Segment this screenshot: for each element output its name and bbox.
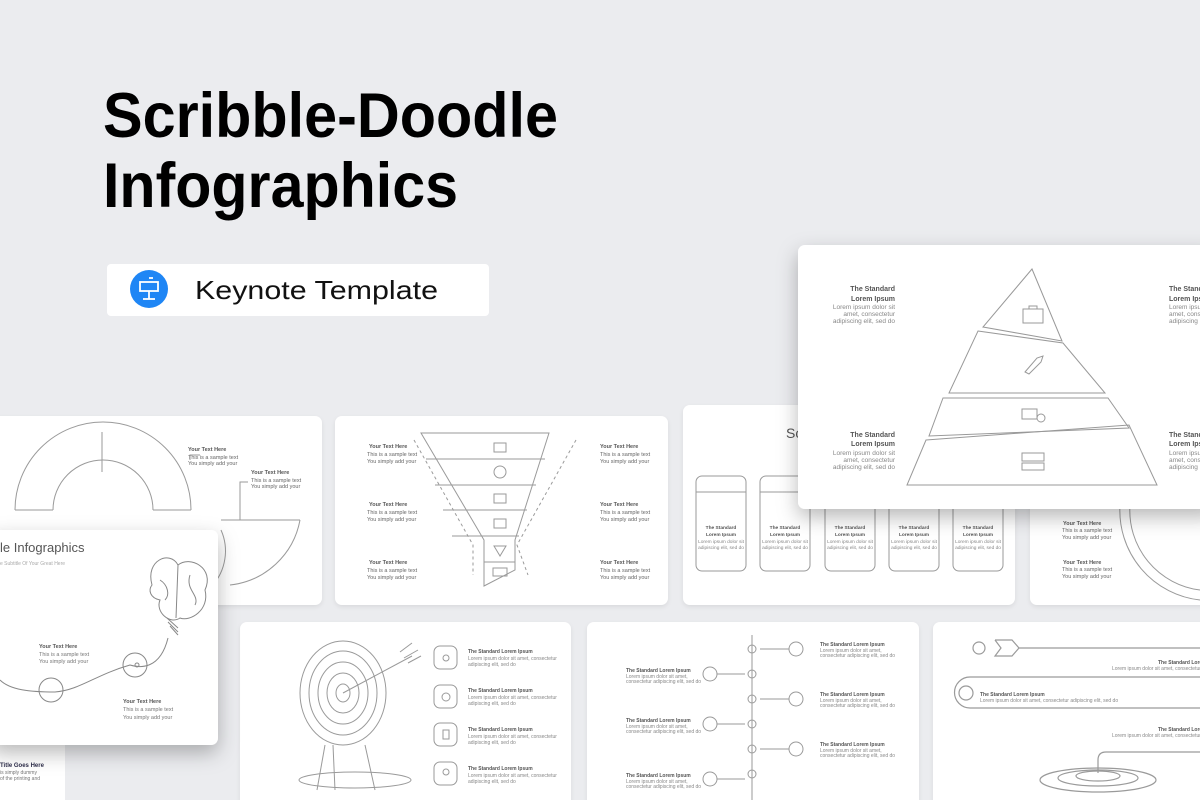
panel: tab cards: Sc <box>786 425 802 441</box>
panel: tab cards: The Standard <box>835 525 865 531</box>
panel: tab cards: Lorem ipsum dolor sit <box>698 539 745 545</box>
title <box>103 81 558 221</box>
panel: target: adipiscing elit, sed do <box>468 740 516 746</box>
panel: timeline: Lorem ipsum dolor sit amet, <box>820 648 882 654</box>
panel: tab cards: Lorem ipsum dolor sit <box>762 539 809 545</box>
text: funnel labels: You simply add your <box>600 575 649 581</box>
text: funnel labels: This is a sample text <box>600 568 651 574</box>
panel: tab cards: Lorem ipsum dolor sit <box>891 539 938 545</box>
panel: tab cards: Lorem Ipsum <box>963 532 993 538</box>
panel: tab cards: adipiscing elit, sed do <box>955 545 1001 551</box>
panel: brain card: You simply add your <box>39 659 88 665</box>
panel: target: adipiscing elit, sed do <box>468 701 516 707</box>
panel: timeline: The Standard Lorem Ipsum <box>820 692 885 698</box>
panel: cycle (right, partly hidden): You simply add your <box>1062 574 1111 580</box>
panel: small bottom-left card: Title Goes Here <box>0 763 45 769</box>
panel: roadmap: Lorem ipsum dolor sit amet, consectetur <box>1112 666 1200 672</box>
text: funnel labels: Your Text Here <box>600 502 638 508</box>
panel: timeline: The Standard Lorem Ipsum <box>626 773 691 779</box>
panel: pyramid: The Standard <box>850 286 895 293</box>
text: funnel labels: You simply add your <box>600 517 649 523</box>
text: arc labels <box>188 447 302 490</box>
panel: roadmap: Lorem ipsum dolor sit amet, consectetur adipiscing elit, sed do <box>980 698 1118 704</box>
keynote badge <box>107 264 489 316</box>
panel: target: Lorem ipsum dolor sit amet, consectetur <box>468 773 557 779</box>
panel: pyramid: amet, consectetur <box>843 457 896 464</box>
panel: brain card: Your Text Here <box>39 644 77 650</box>
panel: tab cards: Lorem ipsum dolor sit <box>827 539 874 545</box>
panel: cycle (right, partly hidden) <box>1030 405 1200 605</box>
panel: brain card <box>0 530 218 745</box>
panel: roadmap: The Standard Lorem Ipsum <box>980 692 1045 698</box>
text: arc labels: You simply add your <box>251 484 300 490</box>
panel: tab cards: The Standard <box>770 525 800 531</box>
panel: tab cards: adipiscing elit, sed do <box>698 545 744 551</box>
panel: brain card: e Subtitle Of Your Great Here <box>0 561 65 567</box>
panel: timeline: consectetur adipiscing elit, sed do <box>626 784 701 790</box>
panel: pyramid: adipiscing elit, sed do <box>833 464 895 471</box>
panel: pyramid: Lorem Ipsum <box>851 296 895 303</box>
panel: timeline: consectetur adipiscing elit, sed do <box>820 753 895 759</box>
panel: tab cards: Lorem Ipsum <box>706 532 736 538</box>
panel: timeline <box>587 622 919 800</box>
panel: pyramid: Lorem Ipsum <box>851 441 895 448</box>
panel: target: The Standard Lorem Ipsum <box>468 688 533 694</box>
panel: timeline: Lorem ipsum dolor sit amet, <box>820 748 882 754</box>
panel: pyramid <box>798 245 1200 509</box>
text: funnel labels <box>367 444 651 581</box>
text: funnel labels: You simply add your <box>367 517 416 523</box>
text: arc labels: This is a sample text <box>188 455 239 461</box>
text: arc labels: You simply add your <box>188 461 237 467</box>
panel: tab cards: adipiscing elit, sed do <box>762 545 808 551</box>
panel: pyramid: Lorem ipsum dolor sit <box>833 450 895 457</box>
panel: tab cards <box>683 405 1015 605</box>
panel: target <box>240 622 571 800</box>
panel: pyramid: adipiscing elit, sed do <box>833 318 895 325</box>
panel: timeline: Lorem ipsum dolor sit amet, <box>820 698 882 704</box>
text: funnel labels: You simply add your <box>600 459 649 465</box>
text: funnel labels: Your Text Here <box>369 560 407 566</box>
title: Infographics <box>103 151 458 221</box>
panel: target: Lorem ipsum dolor sit amet, consectetur <box>468 656 557 662</box>
text: funnel labels: This is a sample text <box>600 510 651 516</box>
text: funnel labels: Your Text Here <box>600 444 638 450</box>
panel: brain card: le Infographics <box>0 540 85 555</box>
panel: funnel <box>335 416 668 605</box>
panel: timeline: The Standard Lorem Ipsum <box>626 718 691 724</box>
panel: target: The Standard Lorem Ipsum <box>468 649 533 655</box>
icon: keynote <box>130 270 168 308</box>
panel: small bottom-left card: of the printing and <box>0 776 40 782</box>
panel: timeline: consectetur adipiscing elit, sed do <box>626 729 701 735</box>
text: funnel labels: This is a sample text <box>367 568 418 574</box>
text: funnel labels: Your Text Here <box>369 502 407 508</box>
panel: arc puzzle <box>0 416 322 605</box>
panel: brain card: This is a sample text <box>39 652 90 658</box>
text: funnel labels: This is a sample text <box>367 452 418 458</box>
icon: brain bulb <box>0 558 207 702</box>
panel: tab cards: Lorem Ipsum <box>899 532 929 538</box>
panel: brain card: You simply add your <box>123 715 172 721</box>
panel: roadmap <box>933 622 1200 800</box>
panel: timeline: Lorem ipsum dolor sit amet, <box>626 724 688 730</box>
panel: cycle (right, partly hidden): You simply add your <box>1062 535 1111 541</box>
panel: tab cards: Lorem Ipsum <box>770 532 800 538</box>
panel: brain card: This is a sample text <box>123 707 174 713</box>
text: funnel labels: You simply add your <box>367 459 416 465</box>
panel: tab cards: adipiscing elit, sed do <box>891 545 937 551</box>
panel: cycle (right, partly hidden): Your Text Here <box>1063 521 1101 527</box>
panel: timeline: consectetur adipiscing elit, sed do <box>820 703 895 709</box>
panel: tab cards: Lorem Ipsum <box>835 532 865 538</box>
panel: timeline: The Standard Lorem Ipsum <box>820 742 885 748</box>
panel: target: The Standard Lorem Ipsum <box>468 727 533 733</box>
text: arc labels: Your Text Here <box>188 447 226 453</box>
panel: pyramid: Lorem ipsum dolor sit <box>833 304 895 311</box>
panel: timeline: The Standard Lorem Ipsum <box>820 642 885 648</box>
keynote badge: Keynote Template <box>195 275 438 305</box>
panel: timeline: Lorem ipsum dolor sit amet, <box>626 779 688 785</box>
text: arc labels: Your Text Here <box>251 470 289 476</box>
panel: target: Lorem ipsum dolor sit amet, consectetur <box>468 695 557 701</box>
title: Scribble-Doodle <box>103 81 558 151</box>
panel: small bottom-left card <box>0 745 65 800</box>
text: funnel labels: Your Text Here <box>600 560 638 566</box>
panel: timeline: The Standard Lorem Ipsum <box>626 668 691 674</box>
panel: target: adipiscing elit, sed do <box>468 662 516 668</box>
panel: target: adipiscing elit, sed do <box>468 779 516 785</box>
panel: tab cards: The Standard <box>706 525 736 531</box>
panel: tab cards: The Standard <box>963 525 993 531</box>
panel: roadmap: Lorem ipsum dolor sit amet, consectetur <box>1112 733 1200 739</box>
panel: cycle (right, partly hidden): Your Text Here <box>1063 560 1101 566</box>
panel: tab cards: The Standard <box>899 525 929 531</box>
panel: tab cards: Lorem ipsum dolor sit <box>955 539 1002 545</box>
text: funnel labels: This is a sample text <box>367 510 418 516</box>
panel: target: The Standard Lorem Ipsum <box>468 766 533 772</box>
panel: pyramid: The Standard <box>850 432 895 439</box>
text: funnel labels: You simply add your <box>367 575 416 581</box>
panel: timeline: consectetur adipiscing elit, sed do <box>626 679 701 685</box>
panel: cycle (right, partly hidden): This is a sample text <box>1062 528 1113 534</box>
panel: brain card: Your Text Here <box>123 699 161 705</box>
panel: timeline: consectetur adipiscing elit, sed do <box>820 653 895 659</box>
panel: tab cards: adipiscing elit, sed do <box>827 545 873 551</box>
panel: timeline: Lorem ipsum dolor sit amet, <box>626 674 688 680</box>
panel: cycle (right, partly hidden): This is a sample text <box>1062 567 1113 573</box>
text: funnel labels: Your Text Here <box>369 444 407 450</box>
panel: small bottom-left card: is simply dummy <box>0 770 37 776</box>
text: funnel labels: This is a sample text <box>600 452 651 458</box>
text: arc labels: This is a sample text <box>251 478 302 484</box>
panel: target: Lorem ipsum dolor sit amet, consectetur <box>468 734 557 740</box>
panel: pyramid: amet, consectetur <box>843 311 896 318</box>
